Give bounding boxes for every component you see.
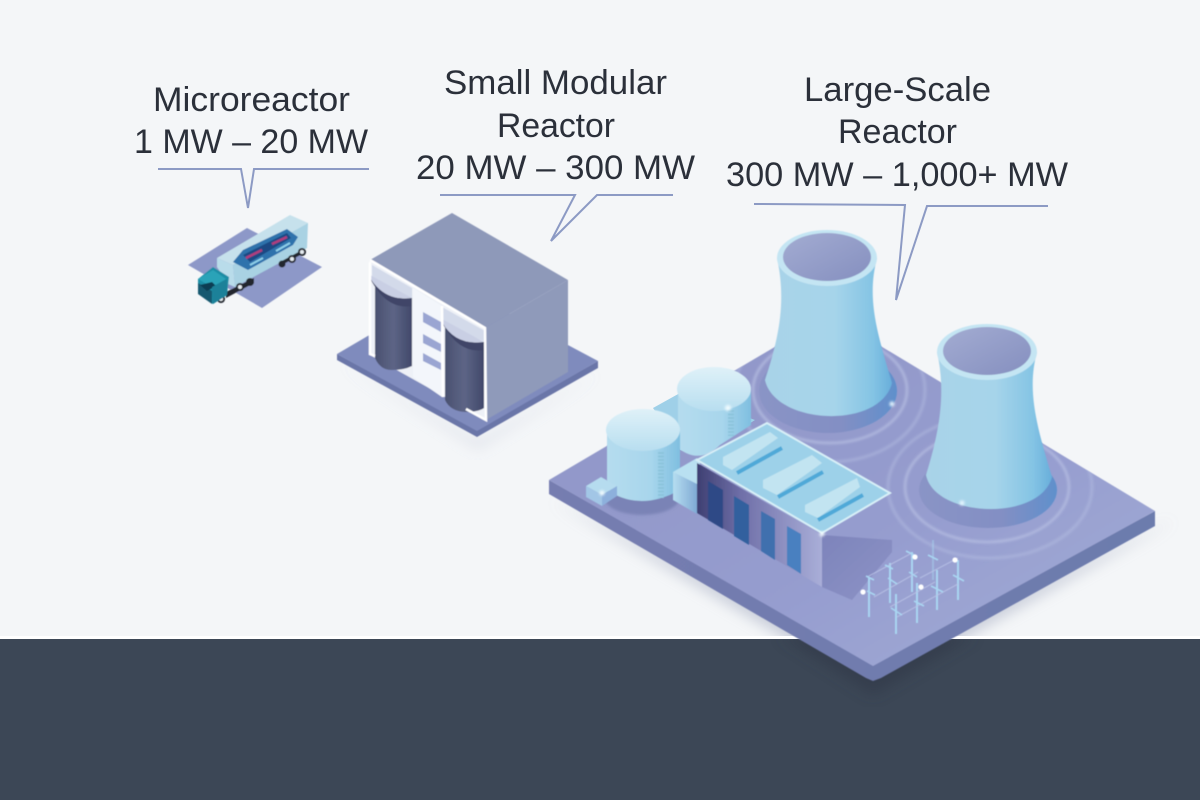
truck wheels <box>217 248 306 303</box>
insulator lights <box>860 554 958 595</box>
storage tank front <box>604 409 680 515</box>
building front wall <box>697 463 822 587</box>
SMR left vessel <box>370 275 412 370</box>
SMR roof <box>370 213 568 328</box>
building windows <box>708 481 801 574</box>
label: large-scale reactor: Reactor <box>838 113 957 151</box>
label: small modular reactor: Reactor <box>497 107 615 145</box>
truck trailer <box>217 215 308 287</box>
SMR right vessel <box>442 319 484 412</box>
label: large-scale reactor: 300 MW – 1,000+ MW <box>726 156 1068 194</box>
label: small modular reactor <box>416 64 695 187</box>
label: microreactor <box>134 81 368 161</box>
label: microreactor: Microreactor <box>153 81 350 119</box>
plant platform shadow <box>590 520 1140 685</box>
label: large-scale reactor: Large-Scale <box>804 71 991 109</box>
SMR platform shadow <box>340 362 600 448</box>
reactor in trailer <box>233 229 298 270</box>
power lines <box>860 540 964 634</box>
cooling tower 1 <box>759 230 897 433</box>
label: small modular reactor: 20 MW – 300 MW <box>416 149 695 187</box>
SMR open front <box>370 260 486 420</box>
SMR platform <box>337 285 598 437</box>
label: small modular reactor: Small Modular <box>444 64 667 102</box>
SMR side wall <box>485 280 568 420</box>
roof units <box>723 432 863 520</box>
building annex <box>673 458 697 514</box>
bottom dark band <box>0 636 1200 800</box>
callout line: large-scale reactor <box>754 204 1048 300</box>
truck pad <box>188 228 322 308</box>
small utility box <box>586 477 617 506</box>
label: large-scale reactor <box>726 71 1068 194</box>
platform ripple rings <box>737 350 1093 559</box>
illustration: large-scale reactor <box>549 230 1175 695</box>
turbine building <box>673 423 892 600</box>
label: microreactor: 1 MW – 20 MW <box>134 123 368 161</box>
building shadow <box>822 535 892 600</box>
illustration: microreactor truck <box>188 215 322 308</box>
callout line: microreactor <box>158 169 369 208</box>
cooling tower 2 <box>919 324 1057 528</box>
illustration: small modular reactor <box>337 213 600 448</box>
building roof <box>697 423 890 533</box>
storage tank rear <box>677 367 751 456</box>
connecting block between tanks <box>653 393 755 455</box>
plant platform <box>549 315 1155 681</box>
callout line: small modular reactor <box>440 195 673 241</box>
truck cab <box>198 267 229 304</box>
